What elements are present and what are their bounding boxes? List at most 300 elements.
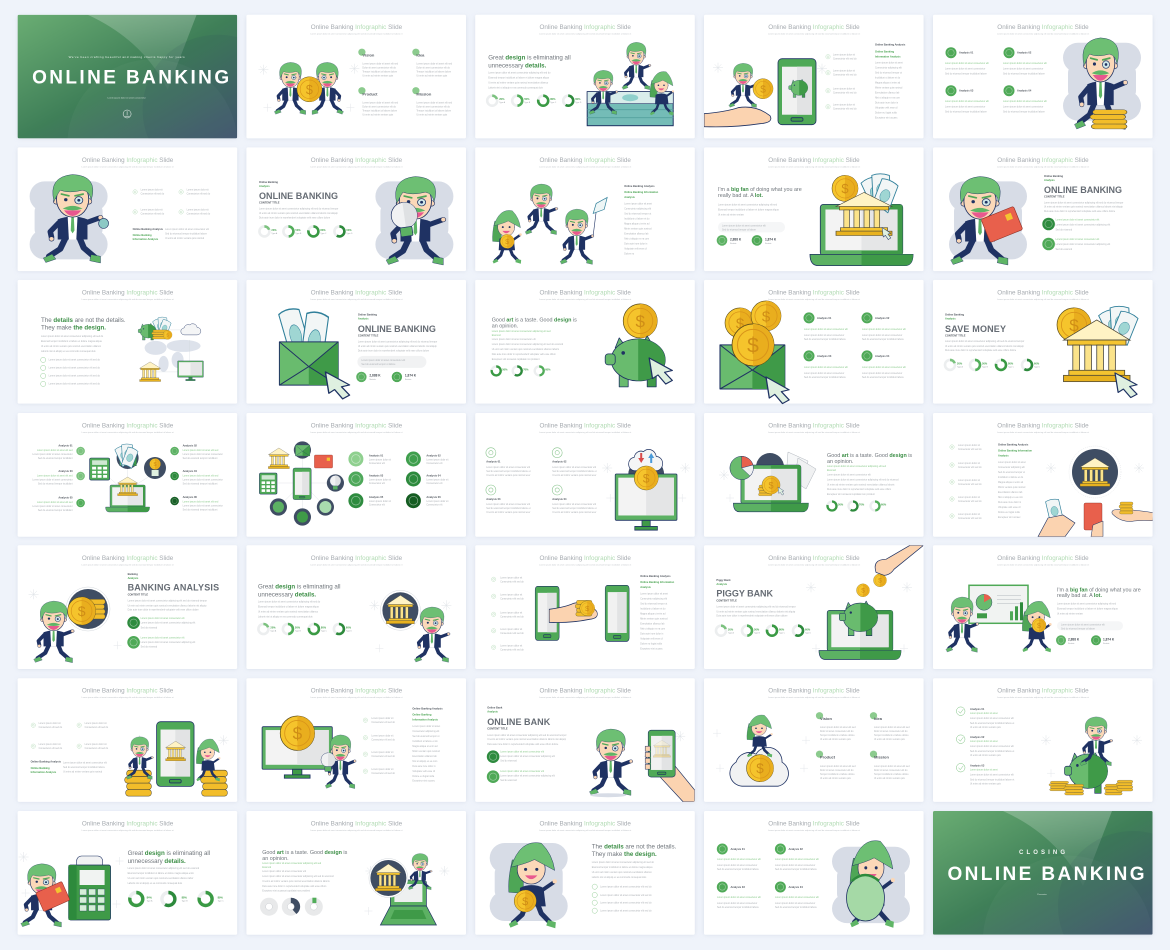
text block: Laboris nisi ut aliquip ex ea commodo consequat duis	[128, 882, 183, 885]
analysis items: Analysis 02	[1017, 51, 1032, 55]
text block: Laboris nisi ut aliquip ex ea commodo consequat duis	[41, 350, 96, 353]
illustration: team on money stack	[587, 42, 674, 126]
analysis column: Dolore eu fugiat nulla	[412, 775, 435, 778]
heading	[768, 24, 860, 36]
heading: Online Banking Infographic Slide	[311, 688, 403, 695]
illustration: cloud and monitor	[602, 449, 690, 530]
chart: donuts: Type C	[320, 233, 327, 235]
text block: Eiusmod	[492, 335, 501, 337]
analysis items: Lorem ipsum dolor sit amet consectetur elit	[486, 503, 530, 506]
heading: Lorem ipsum dolor sit amet consectetur adipiscing elit sed do eiusmod tempor incididunt ut labore et	[539, 298, 632, 301]
analysis column: Duis aute irure dolor in	[412, 765, 436, 768]
heading: Online Banking Infographic Slide	[768, 422, 860, 430]
text block: ONLINE BANKING	[1044, 185, 1122, 195]
text block: Duis aute irure dolor in reprehenderit voluptate velit esse cillum dolore	[487, 743, 559, 746]
right analysis items: Lorem ipsum dolor sit amet consectetur	[183, 453, 223, 456]
analysis text: Online Banking	[31, 766, 50, 770]
node circles	[76, 447, 179, 507]
text block: Sed do eiusmod tempor ut labore	[1061, 627, 1096, 630]
text block: Lorem ipsum dolor sit amet consectetur adipiscing elit sed do eiusmod tempor	[259, 207, 339, 210]
text block: Duis aute irure dolor in reprehenderit voluptate velit esse cillum dolore	[259, 216, 331, 219]
text block: Eiusmod tempor incididunt ut labore et dolore magna aliqua	[41, 340, 102, 343]
text block: CONTENT TITLE	[1044, 194, 1065, 198]
checklist: Lorem ipsum dolor sit amet consectetur elit sed do	[49, 359, 101, 362]
feature rows: Sed do eiusmod	[1056, 249, 1073, 251]
heading: Online Banking Infographic Slide	[82, 820, 174, 828]
icon list: Lorem ipsum dolor sit	[141, 188, 163, 191]
analysis column: Incididunt ut labore et do	[640, 607, 666, 610]
cover subtitle: Lorem ipsum dolor sit amet consectetur	[107, 97, 146, 100]
text: vision idea product mission: Tempor incididunt ut labore dolore	[416, 71, 452, 74]
chart: donuts: 60%	[805, 627, 811, 631]
text block: Ut enim ad minim veniam quis nostrud exercitation ullamco labor	[128, 877, 194, 880]
text block: Lorem ipsum dolor sit amet consectetur elit	[492, 338, 536, 341]
icon list: Consectetur elit sed do	[141, 212, 165, 215]
analysis items: Sed do eiusmod tempor incididunt labore et	[552, 470, 597, 473]
text block: Laboris nisi ut aliquip ex ea commodo consequat duis	[258, 615, 313, 618]
analysis column: Excepteur sint occaec	[412, 780, 436, 783]
stats	[356, 372, 417, 382]
analysis column: Exercitation ullamco lab	[998, 491, 1023, 494]
text: vision idea product mission: Ut enim ad minim veniam quis	[416, 114, 448, 117]
analysis text: Sed do eiusmod tempor incididunt labore	[63, 766, 106, 769]
analysis column: Duis aute irure dolor in	[998, 501, 1022, 504]
text: vision idea product mission: Dolor sit amet consectetur elit do	[416, 106, 451, 109]
analysis items: Lorem ipsum dolor sit amet consectetur	[804, 334, 844, 337]
heading: Online Banking Infographic Slide	[997, 157, 1089, 164]
text: vision idea product mission: Idea	[416, 53, 425, 58]
heading: Lorem ipsum dolor sit amet consectetur adipiscing elit sed do eiusmod tempor incididunt ut labore et	[539, 165, 632, 168]
analysis items: Lorem ipsum dolor sit amet consectetur elit	[775, 896, 819, 899]
feature rows: Lorem ipsum dolor sit amet consectetur elit	[1056, 238, 1100, 241]
heading: Online Banking Infographic Slide	[997, 24, 1089, 31]
analysis items: Consectetur elit	[426, 482, 443, 485]
stats	[717, 235, 777, 246]
analysis items	[717, 844, 819, 909]
analysis column: Excepteur sint occaec	[875, 117, 898, 120]
list with icons: Consectetur elit sed do	[833, 108, 857, 111]
analysis column: Duis aute irure dolor in	[624, 242, 648, 245]
analysis column: Consectetur adipiscing elit	[624, 207, 651, 210]
text block: CONTENT TITLE	[358, 333, 379, 337]
heading: Online Banking Infographic Slide	[768, 24, 860, 31]
chart: radial gauges: Type B	[182, 900, 188, 902]
chart: donuts: 20%	[270, 625, 276, 629]
panel: slide 26 phone on coins	[18, 678, 237, 802]
analysis items: Lorem ipsum dolor sit amet consectetur	[862, 334, 902, 337]
heading	[82, 820, 174, 832]
chart: donuts: 20%	[499, 97, 505, 101]
chart: radial gauges: 89%	[218, 896, 223, 900]
analysis column: Online Banking Analysis	[998, 442, 1029, 446]
analysis column: Online Banking Analysis	[412, 707, 443, 711]
heading	[310, 820, 403, 832]
stats	[1056, 635, 1115, 645]
feature rows: Sed do eiusmod	[500, 780, 518, 782]
analysis text: Information Analysis	[31, 770, 57, 774]
chart: donuts: 70%	[523, 367, 529, 371]
text block: Eiusmod tempor incididunt ut labore et dolore magna aliqua	[592, 866, 653, 869]
chart: donuts: Type A	[728, 631, 735, 634]
text block: Lorem ipsum dolor sit amet consectetur adipiscing elit sed do eiusmod tempor	[358, 340, 437, 343]
text block: ONLINE BANKING	[259, 191, 338, 201]
chart: donuts: 20%	[271, 228, 277, 232]
text block: Lorem ipsum dolor sit amet consectetur adipiscing elit sed do	[592, 861, 655, 864]
text: vision idea product mission: Lorem ipsum dolor sit amet elit sed	[820, 765, 856, 768]
left analysis items: Analysis 05	[58, 496, 73, 500]
stats: Statistic	[405, 378, 412, 381]
text block	[718, 187, 802, 232]
heading: Online Banking Infographic Slide	[540, 688, 631, 695]
text block: Banking	[128, 572, 138, 576]
analysis items: Analysis 03	[486, 497, 501, 501]
text block: PIGGY BANK	[716, 589, 773, 599]
chart: donuts: 50%	[838, 502, 844, 506]
icon list: Consectetur elit sed do	[500, 632, 524, 635]
analysis column: Voluptate velit esse cil	[640, 637, 663, 640]
heading	[997, 24, 1089, 36]
chart: donuts	[828, 502, 887, 510]
feature rows: Sed do eiusmod	[141, 646, 158, 648]
heading: Lorem ipsum dolor sit amet consectetur adipiscing elit sed do eiusmod tempor incididunt ut labore et	[539, 563, 632, 566]
text block: Sed do eiusmod tempor ut labore	[361, 363, 396, 366]
icon list: Consectetur elit sed do	[500, 615, 524, 618]
text: vision idea product mission	[816, 712, 910, 780]
panel: slide 6 man with money bag	[18, 147, 237, 271]
text block: Online Banking	[945, 312, 964, 316]
heading	[82, 289, 174, 301]
analysis items: Consectetur elit	[369, 462, 385, 465]
chart: donuts: 20%	[957, 361, 963, 365]
text block: The details are not the details.	[41, 317, 126, 324]
heading: Online Banking Infographic Slide	[82, 422, 174, 430]
text block: Eiusmod tempor incididunt ut labore et dolore magna aliqua	[488, 77, 550, 80]
analysis items: Sed do eiusmod tempor incididunt labore	[862, 376, 904, 379]
analysis column: Sed do eiusmod tempor ut	[640, 602, 668, 605]
left analysis items	[32, 444, 73, 512]
analysis column: Lorem ipsum dolor sit amet	[875, 62, 903, 65]
icon list: Lorem ipsum dolor sit	[85, 722, 107, 725]
text block: Good art is a taste. Good design is	[827, 453, 912, 459]
analysis items: Lorem ipsum dolor sit amet consectetur elit	[804, 366, 848, 369]
chart: donuts: Type D	[575, 102, 582, 104]
analysis items: Sed do eiusmod tempor incididunt labore et	[486, 470, 531, 473]
illustration: three characters	[492, 184, 607, 264]
analysis items: Ut enim ad minim veniam quis nostrud exer	[552, 511, 597, 514]
list with icons: Lorem ipsum dolor sit	[833, 54, 855, 57]
analysis column: Online Banking Information	[640, 580, 675, 584]
text block: Lorem ipsum dolor sit amet consectetur adipiscing elit sed do eiusmod	[128, 867, 200, 870]
heading	[997, 289, 1089, 301]
analysis items: Consectetur elit	[369, 504, 385, 506]
illustration: woman with green purse	[832, 841, 910, 928]
feature rows: Sed do eiusmod	[1056, 229, 1073, 231]
analysis text: Ut enim ad minim veniam quis nostrud	[63, 771, 103, 774]
analysis items: Lorem ipsum dolor sit amet consectetur elit	[945, 100, 989, 103]
analysis items: Sed do eiusmod tempor incididunt labore	[804, 338, 846, 341]
stats: Statistic	[369, 378, 376, 381]
analysis checklist: Analysis 02	[970, 735, 985, 739]
stats: 1,874 K	[765, 237, 777, 241]
feature rows: Lorem ipsum dolor sit amet consectetur adipiscing elit	[141, 641, 196, 644]
text block: Great design is eliminating all	[488, 55, 571, 62]
heading	[768, 422, 860, 434]
analysis checklist: Ut enim ad minim veniam quis	[970, 754, 1002, 757]
analysis column	[624, 184, 659, 255]
analysis text: Online Banking Analysis	[133, 227, 163, 231]
chart: donuts: Type B	[295, 630, 302, 632]
chart: donuts	[716, 626, 812, 636]
analysis column: Nisi ut aliquip ex ea com	[624, 237, 649, 240]
panel: slide 10 man with credit card	[933, 147, 1153, 271]
heading: Online Banking Infographic Slide	[311, 289, 403, 296]
list with icons: Consectetur elit sed do	[833, 58, 857, 61]
text block: Analysis	[358, 316, 369, 320]
text block: Eiusmod tempor incididunt ut labore et dolore magna aliqua enim	[128, 872, 194, 875]
chart: donuts: 60%	[1034, 361, 1040, 365]
heading: Lorem ipsum dolor sit amet consectetur adipiscing elit sed do eiusmod tempor incididunt ut labore et	[997, 165, 1089, 168]
text block: I'm a big fan of doing what you are	[718, 187, 802, 193]
left analysis items: Lorem ipsum dolor sit amet elit sed	[37, 449, 73, 452]
feature rows: Sed do eiusmod	[141, 627, 158, 629]
icon list: Consectetur elit sed do	[958, 483, 982, 486]
text block: Lorem ipsum dolor sit amet consectetur adipiscing elit sed do eiusmod tempor	[128, 599, 207, 602]
analysis items: Lorem ipsum dolor sit amet consectetur	[945, 106, 985, 109]
analysis items: Lorem ipsum dolor sit amet consectetur	[775, 864, 815, 867]
chart: donuts: 60%	[545, 367, 551, 371]
heading: Online Banking Infographic Slide	[82, 157, 174, 164]
analysis checklist: Analysis 03	[970, 764, 985, 768]
heading: Lorem ipsum dolor sit amet consectetur adipiscing elit sed do eiusmod tempor incididunt ut labore et	[310, 563, 403, 566]
text block: Ut enim ad minim veniam quis nostrud exercitation ullamco laboris	[262, 880, 330, 883]
analysis items: Analysis 02	[426, 454, 441, 458]
heading: Online Banking Infographic Slide	[82, 555, 174, 562]
analysis items: Consectetur elit	[426, 504, 443, 506]
chart: donuts: Type C	[550, 102, 557, 104]
illustration: man with magnified coin	[29, 587, 122, 663]
icon list: Consectetur elit sed do	[500, 580, 524, 583]
checklist: Lorem ipsum dolor sit amet consectetur elit sed do	[600, 910, 652, 912]
heading: Online Banking Infographic Slide	[82, 688, 174, 695]
text block: Lorem ipsum dolor sit amet consectetur adipiscing elit sed	[262, 862, 322, 865]
analysis text: Lorem ipsum dolor sit amet consectetur elit	[63, 762, 107, 765]
analysis items	[486, 448, 597, 514]
chart: radial gauges	[130, 892, 224, 906]
text block: Analysis	[128, 576, 139, 580]
panel: slide 29 cloud and woman	[704, 678, 924, 802]
analysis checklist: Lorem ipsum dolor sit amet consectetur elit	[970, 774, 1014, 777]
illustration: man	[30, 175, 109, 263]
text block	[487, 706, 567, 746]
analysis column: Voluptate velit esse cil	[875, 107, 898, 110]
heading: Lorem ipsum dolor sit amet consectetur adipiscing elit sed do eiusmod tempor incididunt ut labore et	[310, 298, 403, 301]
analysis items: Analysis 01	[486, 460, 501, 464]
text block	[128, 572, 219, 611]
analysis items: Lorem ipsum dolor sit amet consectetur	[1003, 106, 1043, 109]
text block: Online Bank	[487, 706, 503, 710]
icon list: Lorem ipsum dolor sit	[958, 513, 980, 516]
icon list: Lorem ipsum dolor sit	[371, 717, 394, 720]
heading: Online Banking Infographic Slide	[82, 289, 174, 296]
stats: 1,874 K	[405, 373, 417, 377]
text: vision idea product mission: Vision	[362, 53, 375, 58]
analysis items: Lorem ipsum dolor sit amet consectetur elit	[1003, 100, 1047, 103]
text block	[592, 844, 677, 879]
analysis items: Analysis 06	[426, 495, 441, 499]
heading	[310, 555, 403, 566]
analysis column: Analysis	[624, 195, 635, 199]
heading: Lorem ipsum dolor sit amet consectetur adipiscing elit sed do eiusmod tempor incididunt ut labore et	[539, 33, 632, 36]
text block: unnecessary details.	[488, 63, 547, 70]
heading: Online Banking Infographic Slide	[540, 422, 631, 430]
text block: Ut enim ad minim veniam quis nostrud exercitation ullamco	[258, 610, 319, 613]
heading	[997, 422, 1089, 434]
heading: Online Banking Infographic Slide	[311, 157, 403, 164]
text: vision idea product mission: Lorem ipsum dolor sit amet elit sed	[362, 102, 399, 105]
text block: Ut enim ad minim veniam quis nostrud exercitation ullamco laboris nisi aliquip	[259, 212, 338, 215]
text block	[258, 584, 341, 618]
text block: Duis aute irure dolor in reprehenderit voluptate velit esse cillum dolore	[1044, 210, 1116, 213]
analysis column: Consectetur adipiscing elit	[412, 730, 440, 733]
text block: CONTENT TITLE	[945, 333, 966, 337]
analysis items: Lorem ipsum dolor sit amet consectetur elit	[862, 328, 906, 331]
text block: CONTENT TITLE	[487, 727, 508, 731]
closing title: ONLINE BANKING	[948, 864, 1144, 885]
analysis column: Lorem ipsum dolor sit amet	[624, 202, 652, 205]
panel: slide 15 save money	[933, 280, 1153, 404]
analysis column: Nisi ut aliquip ex ea com	[412, 760, 437, 763]
icon list: Consectetur elit sed do	[141, 192, 165, 195]
chart: donuts: Type D	[346, 233, 353, 235]
analysis column: Incididunt ut labore et do	[875, 77, 901, 80]
heading: Lorem ipsum dolor sit amet consectetur adipiscing elit sed do eiusmod tempor incididunt ut labore et	[768, 165, 860, 168]
text block: Lorem ipsum dolor sit amet consectetur adipiscing elit sed	[1057, 602, 1117, 605]
text: vision idea product mission: Vision	[820, 716, 832, 721]
feature rows	[487, 750, 555, 783]
analysis column: Magna aliqua ut enim ad	[640, 612, 666, 615]
analysis text: Online Banking Analysis	[31, 760, 61, 764]
text: vision idea product mission: Dolor sit amet consectetur elit do	[416, 67, 451, 70]
icon list: Lorem ipsum dolor sit	[371, 751, 394, 754]
heading	[310, 289, 403, 301]
analysis items: Lorem ipsum dolor sit amet consectetur elit	[945, 62, 989, 65]
text block: Eiusmod tempor incididunt ut labore et dolore magna aliqua	[718, 208, 779, 211]
text block: Analysis	[1044, 178, 1055, 182]
text block: Excepteur sint occaecat cupidatat non proident	[492, 358, 540, 361]
stats: Statistic	[1068, 642, 1075, 645]
heading	[768, 820, 860, 832]
right analysis items: Lorem ipsum dolor sit amet elit sed	[183, 474, 219, 478]
analysis items: Lorem ipsum dolor sit amet consectetur elit	[486, 466, 530, 469]
heading: Lorem ipsum dolor sit amet consectetur adipiscing elit sed do eiusmod tempor incididunt ut labore et	[997, 696, 1089, 699]
text block: Lorem ipsum dolor sit amet consectetur adipiscing elit sed do	[258, 600, 321, 603]
analysis column: Magna aliqua ut enim ad	[998, 481, 1024, 484]
heading	[539, 157, 632, 168]
text: vision idea product mission	[358, 49, 453, 117]
icon list	[950, 444, 982, 520]
text block: Ut enim ad minim veniam quis nostrud exercitation ullamco laboris nisi aliquip	[487, 738, 567, 741]
text: vision idea product mission: Ut enim ad minim veniam quis	[874, 738, 906, 741]
heading: Lorem ipsum dolor sit amet consectetur adipiscing elit sed do eiusmod tempor incididunt ut labore et	[768, 33, 860, 36]
feature rows	[1042, 218, 1111, 251]
analysis column: Excepteur sint occaec	[998, 516, 1021, 519]
text block: Lorem ipsum dolor sit amet consectetur adipiscing elit sed do eiusmod	[262, 875, 334, 878]
panel: slide 32 art and design	[246, 811, 466, 935]
analysis items: Analysis 01	[730, 847, 745, 851]
checklist: Lorem ipsum dolor sit amet consectetur elit sed do	[49, 375, 101, 378]
icon list: Lorem ipsum dolor sit	[958, 462, 980, 465]
chart: donuts: 50%	[295, 625, 301, 629]
text block: They make the design.	[592, 851, 657, 858]
text block: Analysis	[716, 582, 728, 586]
analysis text: Sed do eiusmod tempor incididunt labore	[165, 232, 208, 235]
chart: donuts: Type D	[805, 632, 812, 634]
left analysis items: Lorem ipsum dolor sit amet elit sed	[37, 501, 73, 504]
analysis column	[875, 43, 906, 120]
analysis checklist: Lorem ipsum dolor sit amet	[970, 769, 998, 772]
text: vision idea product mission: Product	[820, 755, 836, 760]
analysis items: Analysis 01	[959, 51, 974, 55]
analysis column: Voluptate velit esse cil	[412, 770, 435, 773]
heading	[768, 157, 860, 168]
chart: donuts: 80%	[779, 627, 785, 631]
icon list: Consectetur elit sed do	[371, 739, 396, 742]
heading: Online Banking Infographic Slide	[311, 820, 403, 828]
icon list: Consectetur elit sed do	[85, 747, 109, 750]
illustration: coins in envelope	[720, 301, 789, 404]
panel: slide 5 analysis with man on coins	[933, 15, 1153, 138]
right analysis items: Sed do eiusmod tempor incididunt	[183, 482, 218, 486]
analysis checklist	[956, 707, 1015, 786]
text block: Ut enim ad minim veniam quis nostrud exercitation ullamco laboris nisi aliquip	[716, 610, 796, 613]
heading: Lorem ipsum dolor sit amet consectetur adipiscing elit sed do eiusmod tempor incididunt ut labore et	[539, 696, 632, 699]
text block	[128, 850, 210, 885]
panel: slide 12 envelope money	[246, 280, 466, 404]
feature rows: Lorem ipsum dolor sit amet consectetur elit	[500, 751, 544, 754]
text block: Ut enim ad minim veniam quis nostrud exercitation ullamco laboris nisi aliquip	[358, 345, 437, 348]
text block: Ut enim ad minim veniam quis nostrud exercitation ullamco laboris	[827, 484, 895, 487]
text: vision idea product mission: Ut enim ad minim veniam quis	[416, 75, 448, 78]
text block: SAVE MONEY	[945, 324, 1006, 334]
chart: radial gauges: 88%	[182, 896, 187, 900]
feature rows: Lorem ipsum dolor sit amet consectetur adipiscing elit	[1056, 243, 1111, 246]
analysis items: Lorem ipsum dolor sit amet consectetur elit	[775, 858, 819, 861]
illustration: woman and coin	[490, 843, 568, 928]
text block: Sed do eiusmod tempor ut labore	[722, 228, 757, 231]
heading	[539, 555, 632, 566]
chart: donuts	[258, 624, 353, 634]
analysis column: Voluptate velit esse cil	[624, 247, 647, 250]
heading	[768, 289, 860, 301]
heading	[997, 688, 1089, 699]
text block	[1044, 174, 1124, 213]
text block: Lorem ipsum dolor sit amet consectetur adipiscing elit sed	[492, 330, 551, 333]
analysis items: Sed do eiusmod tempor incididunt labore	[945, 73, 987, 76]
analysis checklist: Lorem ipsum dolor sit amet	[970, 712, 998, 715]
text: vision idea product mission: Lorem ipsum dolor sit amet elit sed	[416, 63, 453, 66]
analysis items: Analysis 04	[875, 354, 890, 358]
heading	[310, 24, 403, 36]
heading: Online Banking Infographic Slide	[997, 422, 1089, 430]
feature rows	[127, 616, 196, 649]
icon list: Lorem ipsum dolor sit	[958, 479, 980, 482]
heading: Lorem ipsum dolor sit amet consectetur adipiscing elit sed do eiusmod tempor incididunt ut labore et	[997, 33, 1089, 36]
heading: Lorem ipsum dolor sit amet consectetur adipiscing elit sed do eiusmod tempor incididunt ut labore et	[82, 563, 174, 566]
icon list: Lorem ipsum dolor sit	[500, 628, 523, 631]
icon list: Consectetur elit sed do	[500, 597, 524, 600]
heading: Lorem ipsum dolor sit amet consectetur adipiscing elit sed do eiusmod tempor incididunt ut labore et	[82, 431, 174, 434]
analysis checklist: Sed do eiusmod tempor incididunt labore et	[970, 750, 1015, 753]
